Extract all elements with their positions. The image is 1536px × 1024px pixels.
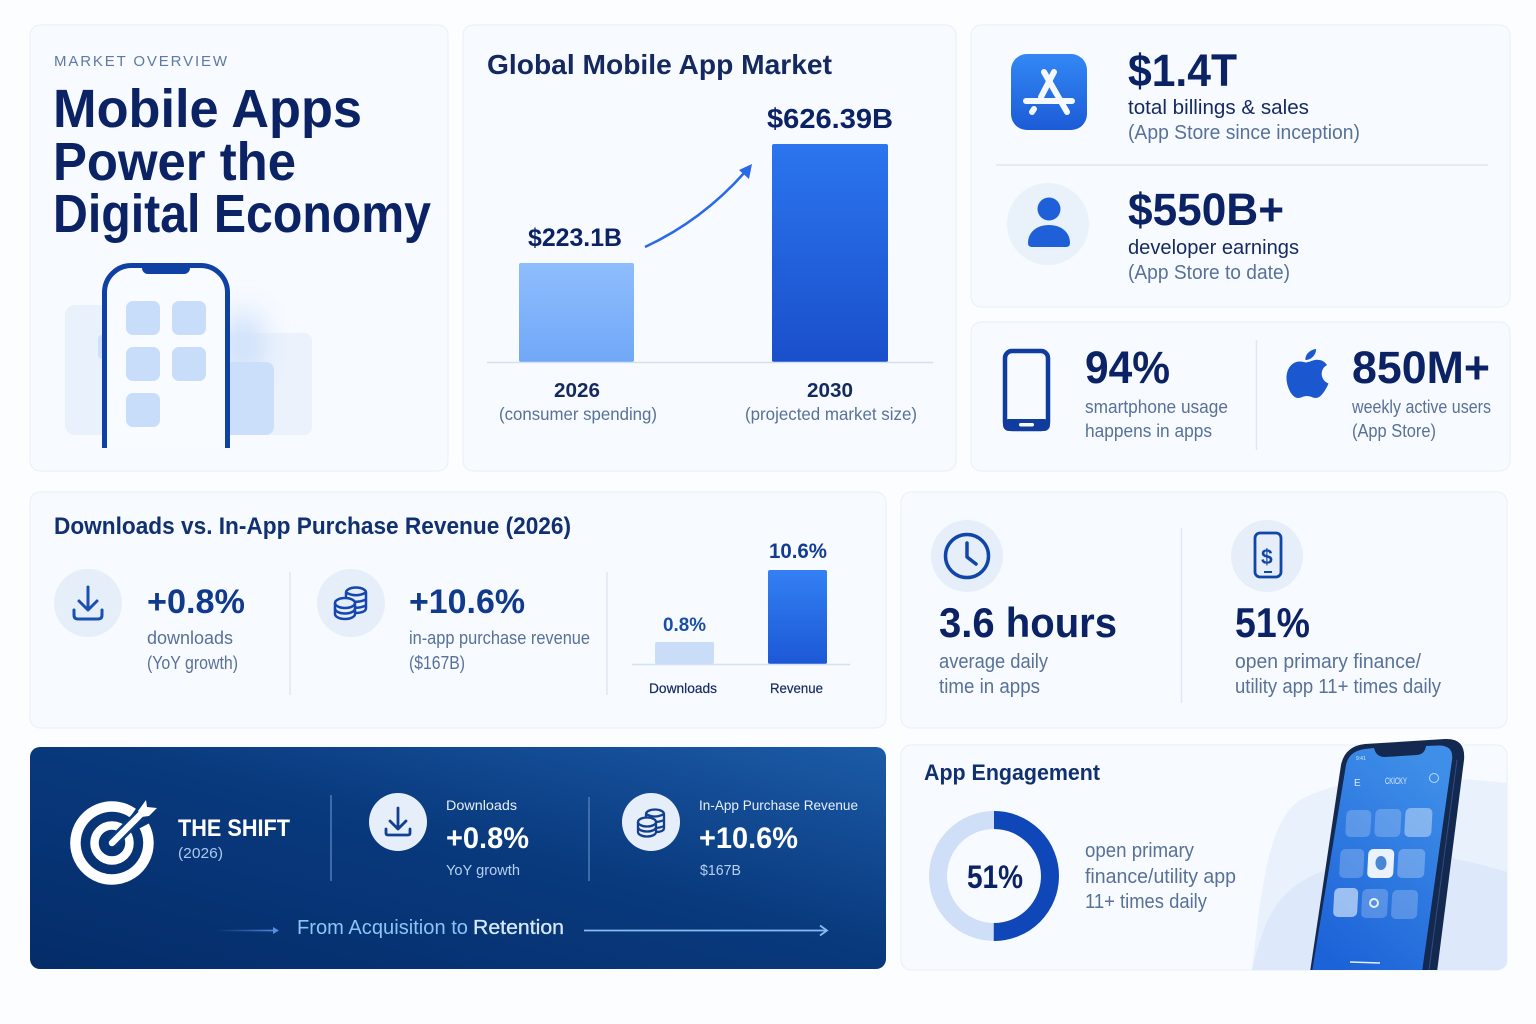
stat: in-app revenue: in-app purchase revenue bbox=[409, 628, 590, 648]
panel: App Store totals bbox=[971, 25, 1510, 307]
stat: in-app purchase revenue bbox=[699, 797, 858, 879]
panel: usage stats bbox=[971, 322, 1510, 471]
tagline: From Acquisition to bbox=[297, 917, 468, 939]
stat: 3.6 hours bbox=[939, 599, 1117, 698]
stat: in-app revenue bbox=[409, 583, 590, 673]
status and header: CKICKY bbox=[1385, 776, 1407, 786]
title: Digital Economy bbox=[53, 184, 431, 244]
stat: downloads bbox=[446, 797, 529, 879]
engagement description: open primary bbox=[1085, 840, 1194, 862]
tagline bbox=[297, 917, 564, 939]
bar chart: growth comparison: Revenue bbox=[770, 680, 823, 696]
bar 2026 bbox=[519, 224, 634, 362]
stat: in-app purchase revenue: +10.6% bbox=[699, 822, 798, 855]
heading: App Engagement bbox=[924, 760, 1101, 785]
stat: 51%: open primary finance/ bbox=[1235, 651, 1421, 673]
status and header: E bbox=[1354, 778, 1361, 789]
engagement description: 11+ times daily bbox=[1085, 891, 1207, 913]
stat: developer earnings: developer earnings bbox=[1128, 237, 1299, 259]
stat: 3.6 hours: time in apps bbox=[939, 676, 1040, 698]
stat: downloads: Downloads bbox=[446, 797, 517, 813]
title: Mobile Apps bbox=[53, 79, 362, 139]
chart title: Global Mobile App Market bbox=[487, 49, 832, 80]
stat: 51%: utility app 11+ times daily bbox=[1235, 676, 1441, 698]
shift heading: (2026) bbox=[178, 845, 223, 862]
shift heading bbox=[178, 815, 290, 862]
icon: developer person bbox=[1007, 183, 1089, 265]
bar chart: growth comparison bbox=[632, 540, 850, 696]
donut chart: 51%: 51% bbox=[967, 859, 1023, 895]
bar chart: growth comparison: 0.8% bbox=[663, 615, 706, 636]
stat: 3.6 hours: average daily bbox=[939, 651, 1048, 673]
bar 2030 bbox=[767, 103, 893, 362]
stat: 94%: smartphone usage bbox=[1085, 397, 1228, 417]
icon: clock bbox=[931, 520, 1003, 592]
stat: 850M+ bbox=[1351, 342, 1491, 441]
stat: 51%: 51% bbox=[1235, 599, 1310, 646]
axis label 2026: 2026 bbox=[554, 380, 600, 402]
stat: downloads growth: (YoY growth) bbox=[147, 653, 238, 673]
icon: app store bbox=[1011, 54, 1087, 130]
status and header: 9:41 bbox=[1356, 756, 1366, 762]
stat: 51% bbox=[1235, 599, 1441, 698]
icon: smartphone bbox=[1003, 351, 1050, 431]
status and header bbox=[1354, 756, 1438, 789]
axis label 2030: 2030 bbox=[807, 380, 853, 402]
bar 2030: $626.39B bbox=[767, 103, 893, 134]
icon: target with arrow bbox=[75, 800, 157, 879]
icon: apple bbox=[1286, 349, 1328, 398]
donut chart: 51% bbox=[938, 820, 1050, 932]
stat: downloads growth bbox=[147, 583, 245, 673]
title: Power the bbox=[53, 132, 296, 192]
panel heading: Downloads vs. In-App Purchase Revenue (2026) bbox=[54, 513, 571, 540]
axis label 2030 bbox=[745, 380, 917, 424]
stat: 850M+: (App Store) bbox=[1352, 421, 1436, 441]
stat: developer earnings bbox=[1128, 184, 1299, 284]
stat: total billings bbox=[1128, 45, 1360, 144]
axis label 2026 bbox=[499, 380, 657, 424]
icon: download bbox=[369, 793, 427, 851]
stat: total billings: total billings & sales bbox=[1128, 97, 1309, 119]
arrow: left lead-in bbox=[215, 927, 279, 934]
stat: 94%: happens in apps bbox=[1085, 421, 1212, 441]
background shapes bbox=[1252, 778, 1507, 970]
illustration: tilted smartphone bbox=[1310, 739, 1464, 972]
stat: 3.6 hours: 3.6 hours bbox=[939, 599, 1117, 646]
stat: in-app purchase revenue: In-App Purchase Revenue bbox=[699, 797, 858, 813]
panel: market overview bbox=[30, 25, 448, 471]
stat: developer earnings: $550B+ bbox=[1128, 184, 1284, 235]
stat: 94% bbox=[1085, 342, 1228, 441]
arrow: growth bbox=[645, 164, 752, 247]
bar chart: growth comparison: 10.6% bbox=[769, 540, 827, 563]
stat: in-app purchase revenue: $167B bbox=[700, 863, 741, 879]
icon: coins bbox=[317, 569, 385, 637]
icon: phone with dollar: $ bbox=[1261, 546, 1273, 569]
tagline: Retention bbox=[473, 917, 564, 939]
icon: phone with dollar bbox=[1231, 520, 1303, 592]
stat: downloads: +0.8% bbox=[446, 822, 529, 855]
arrow: right lead-out bbox=[584, 926, 827, 936]
icon: download bbox=[54, 569, 122, 637]
stat: 850M+: weekly active users bbox=[1351, 397, 1491, 417]
axis label 2030: (projected market size) bbox=[745, 404, 917, 424]
stat: downloads growth: downloads bbox=[147, 628, 233, 648]
bar chart: growth comparison: Downloads bbox=[649, 680, 717, 696]
title bbox=[53, 79, 431, 244]
axis label 2026: (consumer spending) bbox=[499, 404, 657, 424]
stat: in-app revenue: +10.6% bbox=[409, 583, 525, 621]
panel: the shift bbox=[30, 747, 886, 969]
stat: downloads: YoY growth bbox=[446, 863, 520, 879]
stat: developer earnings: (App Store to date) bbox=[1128, 262, 1290, 284]
app tiles bbox=[1333, 808, 1433, 919]
stat: downloads growth: +0.8% bbox=[147, 583, 245, 621]
illustration: phone with app tiles bbox=[65, 264, 312, 448]
stat: 94%: 94% bbox=[1085, 342, 1170, 393]
engagement description: finance/utility app bbox=[1085, 866, 1236, 888]
bar 2026: $223.1B bbox=[528, 224, 622, 252]
eyebrow label: MARKET OVERVIEW bbox=[54, 53, 228, 70]
stat: in-app revenue: ($167B) bbox=[409, 653, 465, 673]
panel: global market chart bbox=[463, 25, 956, 471]
engagement description bbox=[1085, 840, 1236, 913]
icon: coins bbox=[622, 793, 680, 851]
shift heading: THE SHIFT bbox=[178, 815, 290, 842]
stat: 850M+: 850M+ bbox=[1352, 342, 1490, 393]
panel: daily time and finance apps bbox=[901, 492, 1507, 728]
panel: app engagement bbox=[901, 739, 1507, 972]
panel: downloads vs revenue bbox=[30, 492, 886, 728]
stat: total billings: (App Store since inception) bbox=[1128, 122, 1360, 144]
stat: total billings: $1.4T bbox=[1128, 45, 1237, 96]
